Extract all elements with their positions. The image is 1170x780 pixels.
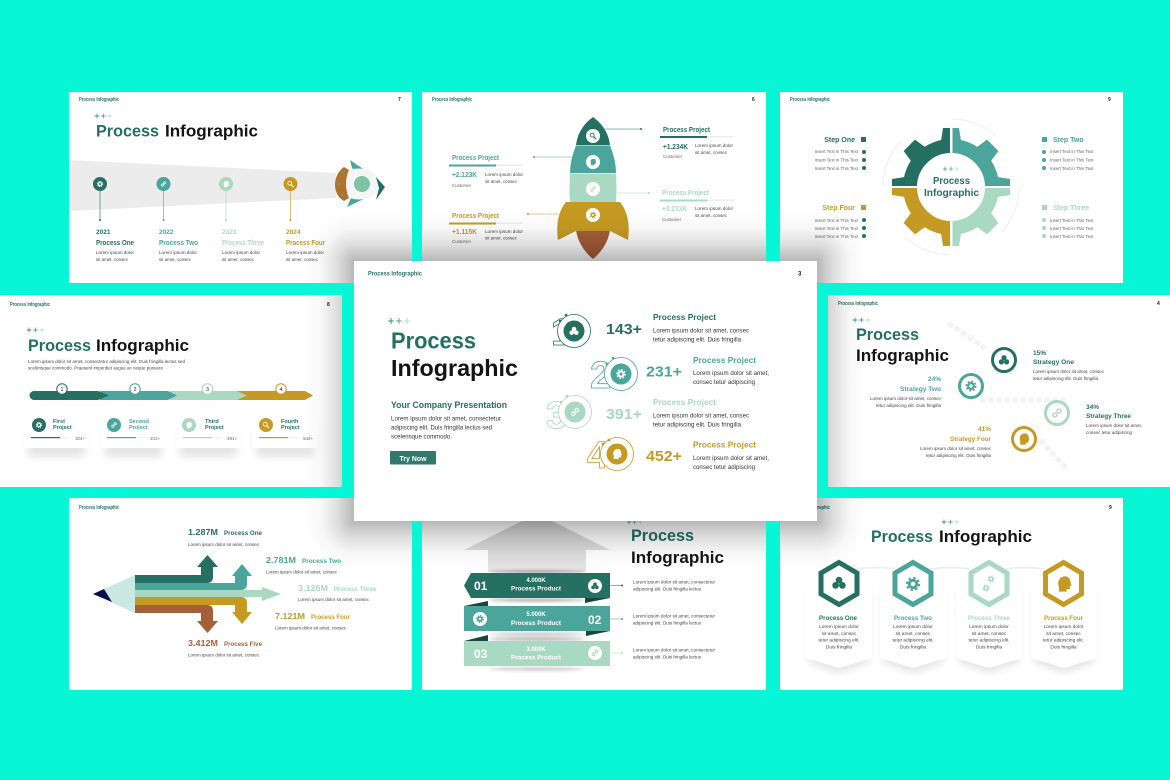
gear centre title [924,167,979,199]
ribbon one: 4.000K [526,578,546,584]
panel: gear slide [780,92,1123,283]
step two: Insert Text in This Text [1050,149,1094,154]
title: Process [96,122,159,140]
intro paragraph [391,416,501,440]
step 2024 [284,177,325,263]
step 2022 [156,177,198,263]
arrow band: 2 [134,387,137,393]
step three [1042,205,1094,239]
process one: 1.287M [188,527,218,537]
step four: Step Four [822,205,855,212]
step two: Insert Text in This Text [1050,166,1094,171]
card second: Project [129,425,148,431]
hex card four: Duis fringilla [1050,644,1077,650]
item one: Process Project [653,312,716,322]
panel: timeline rocket slide: Process Infographic [79,97,119,103]
project block 1: Customer [663,154,683,159]
item three [546,395,749,437]
beam [69,160,336,211]
ribbon notes: Lorem ipsum dolor sit amet, consectetur [633,580,715,586]
step one: Insert Text in This Text [815,158,859,162]
step four: Insert Text in This Text [815,218,859,223]
ribbon notes: adipiscing elit. Duis fringilla lectus [633,586,702,592]
step 2021 [93,177,134,263]
card second: 241+ [150,436,160,441]
panel: arrow cards slide: Process Infographic [10,302,50,308]
strategy two: 24% [928,376,941,383]
subtitle: Your Company Presentation [391,400,507,410]
process four: Process Four [311,615,351,621]
panel: strategy slide: Process Infographic [838,301,878,307]
project block 1: Process Project [663,127,711,134]
item four: Lorem ipsum dolor sit amet, [693,455,769,462]
project block 3: +3.213K [662,206,687,213]
item three: Process Project [653,397,716,407]
step one: Insert Text in This Text [815,149,859,154]
ribbon two: 02 [588,613,602,627]
project block 3: Customer [662,217,682,222]
panel: pencil arrows slide [69,498,412,690]
strategy three [1086,404,1142,436]
hex card two: sit amet, consec [896,631,931,637]
project block 3: Process Project [662,190,710,197]
project block 2: Customer [452,183,472,188]
gear quarter three [952,188,1010,246]
title: Infographic [631,548,724,567]
gear quarter two [952,128,1010,186]
strategy one: 15% [1033,350,1046,357]
process three: 3.126M [298,583,328,593]
project block 3: sit amet, consec [695,213,728,219]
panel: pencil arrows slide: Process Infographic [79,505,119,511]
panel: centre slide [354,261,817,521]
item three: Lorem ipsum dolor sit amet, consec [653,412,749,420]
step 2021: Process One [96,240,134,247]
strategy three: 34% [1086,404,1099,411]
process two: 2.781M [266,555,296,565]
gear centre title: Process [933,176,970,187]
intro text: scelerisque commodo. Praesent imperdiet augue ac neque posuere [28,366,163,372]
item one: tetur adipiscing elit. Duis fringilla [653,336,742,344]
card fourth [252,415,318,448]
step 2024: Process Four [286,240,325,247]
title: Process [871,527,933,546]
hex card one: Process One [819,616,858,622]
process three: Lorem ipsum dolor sit amet, consec [298,597,370,603]
hex card two: Process Two [894,616,932,622]
hex card four [1031,562,1097,668]
project block 4: +1.115K [452,229,477,236]
step three: Insert Text in This Text [1050,234,1094,239]
connectors [610,584,623,654]
title [631,526,724,567]
strategy four: Lorem ipsum dolor sit amet, consec [920,446,992,452]
card third: Project [205,425,224,431]
background gaps between slides [304,211,867,571]
arrow band: 3 [206,387,209,393]
rocket [335,160,385,207]
process two: Process Two [302,559,341,565]
item three: 3 [546,395,567,437]
process three [298,583,377,603]
card third [176,415,241,448]
project block 3: Lorem ipsum dolor [695,206,733,212]
panel: gear slide: Process Infographic [790,97,830,103]
panel: rocket slide: Process Infographic [432,97,472,103]
item three: tetur adipiscing elit. Duis fringilla [653,422,742,428]
process five: 3.412M [188,638,218,648]
intro text: Lorem ipsum dolor sit amet, consectetur adipiscing elit. Duis fringilla lectus sed [28,359,185,365]
button: Try Now [400,456,427,463]
intro paragraph: Lorem ipsum dolor sit amet, consectetur [391,416,501,422]
ribbon three: 03 [474,647,488,661]
item two: Lorem ipsum dolor sit amet, [693,370,769,377]
ribbon one [464,573,610,603]
process one: Process One [224,531,263,537]
ribbon notes [633,580,715,660]
strategy one: Lorem ipsum dolor sit amet, consec [1033,369,1105,375]
hex card four: sit amet, consec [1046,631,1081,637]
panel: centre slide: Process Infographic [368,270,422,278]
item four [587,435,769,477]
title: Infographic [856,346,949,365]
ribbon one: Process Product [511,586,561,592]
item four: 4 [587,435,608,477]
item two [590,355,769,397]
hex card four: Lorem ipsum dolor [1044,624,1084,630]
title: Infographic [939,527,1032,546]
step 2023 [219,177,264,263]
process five: Lorem ipsum dolor sit amet, consec [188,652,260,658]
ribbon three [464,635,610,666]
item two: Process Project [693,355,756,365]
step 2022: Lorem ipsum dolor [159,250,197,256]
faint dotted path [948,323,1068,470]
step 2023: Lorem ipsum dolor [222,250,260,256]
item one: 1 [551,312,572,354]
step three: Insert Text in This Text [1050,218,1094,223]
title: Process [856,325,919,344]
step four: Insert Text in This Text [815,226,859,231]
ribbon one: 01 [474,579,488,593]
arrow band: 1 [61,387,64,393]
project block 4: Lorem ipsum dolor [485,229,523,235]
strategy one: tetur adipiscing elit. Duis fringilla [1033,376,1098,382]
project block 1 [660,127,734,159]
card first: 324+ [75,436,85,441]
panel: timeline rocket slide: 7 [398,97,401,103]
ribbon notes: Lorem ipsum dolor sit amet, consectetur [633,648,715,654]
panel: arrow cards slide [0,295,342,487]
intro paragraph: scelerisque commodo. [391,434,452,440]
ribbon two: Process Product [511,621,561,627]
strategy two: Lorem ipsum dolor sit amet, consec [870,396,942,402]
ribbon two: 5.000K [526,612,546,618]
connector lines [527,128,650,215]
step 2024: 2024 [286,229,301,236]
process one [188,527,263,548]
strategy four: Strategy Four [950,436,991,443]
strategy two: Strategy Two [900,386,941,393]
strategy four: 41% [978,426,991,433]
strategy one [1033,350,1105,382]
step three: Step Three [1053,205,1089,212]
strategy one: Strategy One [1033,359,1074,366]
item three: 391+ [606,406,642,423]
title: Infographic [165,122,258,140]
gear ring [883,119,1019,255]
ribbon two [464,601,610,636]
step two: Insert Text in This Text [1050,158,1094,162]
intro text [28,359,185,372]
project block 1: sit amet, consec [695,150,728,156]
project block 2 [449,155,523,188]
step two [1042,137,1094,171]
button [390,451,436,464]
title: Process [631,526,694,545]
arrow band [30,384,313,400]
step two: Step Two [1053,137,1084,144]
step three: Insert Text in This Text [1050,226,1094,231]
project block 2: Lorem ipsum dolor [485,172,523,178]
step 2023: Process Three [222,240,264,247]
panel: rocket slide [422,92,766,283]
step 2021: 2021 [96,229,111,236]
step 2022: sit amet, consec [159,257,192,263]
title: Infographic [96,336,189,355]
project block 2: Process Project [452,155,500,162]
hex card one: Lorem ipsum dolor [819,624,859,630]
ribbon notes: adipiscing elit. Duis fringilla lectus [633,620,702,626]
hex card three: Duis fringilla [976,644,1002,650]
panel: strategy slide [828,295,1170,487]
item one: 143+ [606,321,642,338]
panel: ribbon arrow slide [422,498,766,690]
step 2021: sit amet, consec [96,257,129,263]
hex card two [880,562,946,668]
hex card two: Duis fringilla [900,644,926,650]
card first: First [53,419,65,425]
panel: timeline rocket slide [69,92,412,283]
project block 3 [660,190,734,222]
card fourth: 542+ [303,436,313,441]
hex card three [956,562,1022,668]
step 2023: sit amet, consec [222,257,255,263]
strategy four: tetur adipiscing elit. Duis fringilla [926,453,991,459]
hex card two: tetur adipiscing elit. [892,638,934,644]
hex card three: sit amet, consec [972,631,1007,637]
panel: hexagon cards slide [780,498,1123,690]
hex card one: Duis fringilla [826,644,852,650]
strategy four [920,426,992,459]
ribbon three: 3.000K [526,647,546,653]
main title: Process [391,328,476,354]
card third: 491+ [227,436,237,441]
connecting line [855,568,1045,569]
hex card four: Process Four [1044,616,1084,622]
strategy three: Strategy Three [1086,413,1131,420]
process four [275,611,351,632]
step 2022: 2022 [159,229,174,236]
step one: Insert Text in This Text [815,166,859,171]
strategy two: tetur adipiscing elit. Duis fringilla [876,403,941,409]
arrow band: 4 [280,387,283,393]
hex card one [806,562,872,668]
project block 4 [449,213,523,244]
title [856,325,949,365]
strategy three: Lorem ipsum dolor sit amet, [1086,423,1142,429]
ribbon notes: adipiscing elit. Duis fringilla lectus [633,654,702,660]
hex card four: tetur adipiscing elit. [1043,638,1084,644]
hex card one: sit amet, consec [822,631,857,637]
title [871,527,1032,546]
intro paragraph: adipiscing elit. Duis fringilla lectus sed [391,424,493,432]
process four: 7.121M [275,611,305,621]
panel: strategy slide: 4 [1157,301,1160,307]
gear quarter one [892,128,950,186]
project block 4: Customer [452,239,472,244]
step 2024: Lorem ipsum dolor [286,250,324,256]
panel: gear slide: 9 [1108,97,1111,103]
up arrow [464,521,610,572]
ribbon notes: Lorem ipsum dolor sit amet, consectetur [633,614,715,620]
step 2022: Process Two [159,240,198,247]
ribbon three: Process Product [511,656,561,662]
step one [815,137,866,171]
hex card two: Lorem ipsum dolor [893,624,933,630]
card second: Second [129,419,149,425]
hex card three: tetur adipiscing elit. [968,638,1010,644]
process five: Process Five [224,642,263,648]
process four: Lorem ipsum dolor sit amet, consec [275,626,347,632]
card second [101,415,166,448]
strategy rings [960,348,1068,450]
project block 4: sit amet, consec [485,236,518,242]
hex card three: Process Three [968,616,1011,622]
step 2021: Lorem ipsum dolor [96,250,134,256]
card shadows [28,425,314,457]
item four: 452+ [646,448,682,465]
gear quarter four [892,188,950,246]
process one: Lorem ipsum dolor sit amet, consec [188,542,260,548]
card fourth: Fourth [281,419,299,425]
item one: Lorem ipsum dolor sit amet, consec [653,328,749,334]
hex card shadows [809,590,1094,673]
strategy three: consec tetur adipiscing [1086,430,1132,436]
step one: Step One [824,137,855,144]
main title [391,328,518,381]
item four: consec tetur adipiscing [693,464,756,471]
project block 2: +2.123K [452,172,477,179]
project block 1: +1.234K [663,144,688,151]
process two: Lorem ipsum dolor sit amet, consec [266,570,338,576]
step 2024: sit amet, consec [286,257,319,263]
process five [188,638,263,658]
card fourth: Project [281,425,300,431]
rocket chart [557,117,629,259]
process two [266,555,341,576]
gear centre title: Infographic [924,188,979,199]
title [28,336,189,355]
item one [551,312,749,354]
title: Process [28,336,91,355]
hex card three: Lorem ipsum dolor [969,624,1009,630]
item two: 231+ [646,364,682,380]
step four: Insert Text in This Text [815,234,859,239]
card first: Project [53,425,72,431]
main title: Infographic [391,355,518,381]
item two: 2 [590,355,611,397]
panel: centre slide: 3 [798,272,802,278]
process three: Process Three [334,587,377,593]
project block 1: Lorem ipsum dolor [695,143,733,149]
project block 4: Process Project [452,213,500,220]
panel: hexagon cards slide: Process Infographic [790,505,830,511]
project block 2: sit amet, consec [485,179,518,185]
title [96,122,258,140]
pencil arrows [93,555,281,633]
ribbon shadows [489,570,585,670]
item four: Process Project [693,440,756,450]
hex card one: tetur adipiscing elit. [818,638,860,644]
panel: arrow cards slide: 8 [327,302,330,308]
panel: rocket slide: 6 [752,97,755,103]
card third: Third [205,419,219,425]
strategy icons [966,355,1061,445]
centre slide shadow [304,211,867,571]
item two: consec tetur adipiscing [693,379,756,386]
step 2023: 2023 [222,229,237,236]
strategy two [870,376,942,409]
panel: hexagon cards slide: 9 [1109,505,1112,511]
step four [815,205,866,239]
card first [24,415,89,448]
